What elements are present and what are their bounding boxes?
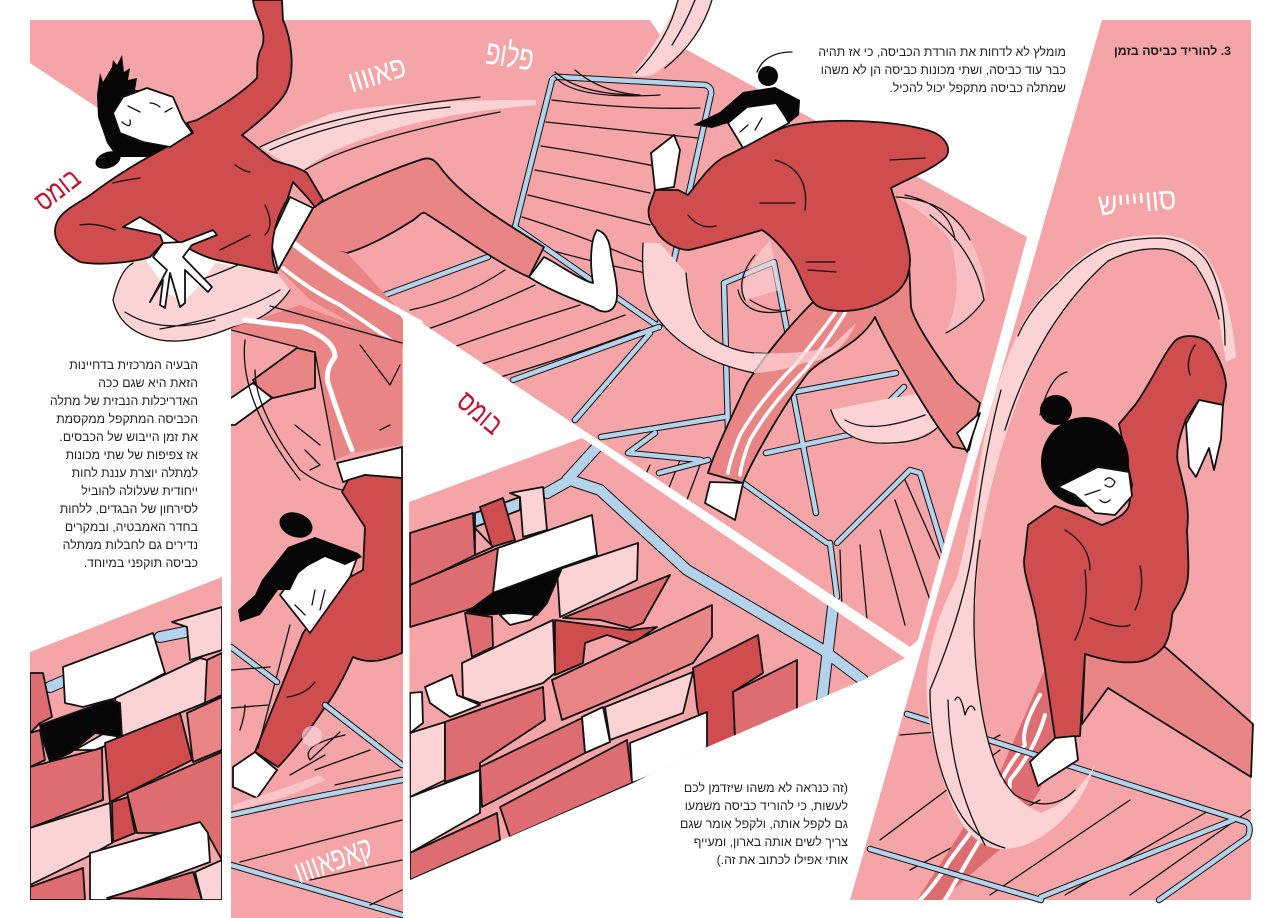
figure three: lower hand (1030, 736, 1078, 786)
figure two: woman with rack (649, 52, 980, 520)
figure three: big ribbon arc (927, 235, 1236, 849)
hand (150, 230, 217, 308)
figure two: ribbon over leg (754, 323, 856, 373)
strip: fist (233, 752, 277, 798)
motion swirl: top ribbon (555, 0, 712, 96)
figure three: upper hand (1186, 400, 1223, 477)
text block: top: כבר עוד כביסה, ושתי מכונות כביסה הן לא משהו (821, 63, 1066, 77)
red sweater with raised arm (55, 0, 323, 273)
figure three: rack frame (870, 714, 1250, 900)
text block: left: הבעיה המרכזית בדחיינות (69, 358, 198, 372)
panel: centre laundry background (409, 438, 905, 880)
figure three: face (1058, 467, 1132, 515)
sound effect: bomes left: בומס (29, 163, 86, 217)
centre laundry on the rack (410, 447, 863, 880)
motion swirl: ribbon around second figure (643, 195, 985, 445)
text block: bottom: גם לקפל אותה, ולקפל אומר שגם (680, 817, 848, 831)
text block: top: מומלץ לא לדחות את הורדת הכביסה, כי אז תהיה (818, 45, 1066, 59)
sound effect: kapow: קאפאוווו (289, 829, 377, 890)
figure three: woman seen from above (870, 235, 1253, 900)
figure two: fist (651, 135, 680, 190)
sound effect: paaooo: פאוווו (344, 49, 410, 100)
face (113, 88, 192, 147)
text block: left: נדירים גם לחבלות ממתלה (63, 538, 198, 552)
sound effect: plop: פלופ (483, 33, 537, 79)
strip: face (280, 555, 358, 633)
strip: motion lines (244, 340, 342, 490)
text block: top: שמתלה כביסה מתקפל יכול להכיל. (889, 81, 1066, 95)
strip: neck area (320, 495, 365, 560)
figure two: sock right (957, 413, 980, 452)
text block: left: בחדר האמבטיה, ובמקרים (65, 520, 198, 534)
figure three: leg stripes second (945, 715, 1045, 900)
figure two: hair (693, 87, 800, 128)
figure three: left leg dark (917, 669, 1055, 900)
panel: right scene background (850, 20, 1251, 900)
panel: vertical strip background (231, 262, 403, 918)
figure two: pants stripes (728, 313, 835, 473)
text block: left (50, 358, 198, 570)
pants: figure one second leg (280, 240, 403, 350)
lower-left: rack rail (50, 632, 185, 687)
pants stripe lower (283, 268, 400, 347)
lower-left laundry on the rack (30, 607, 222, 900)
figure two: hair bun (758, 66, 778, 86)
strip: waistband (337, 447, 402, 482)
text block: bottom: לעשות, כי להוריד כביסה משמעו (685, 799, 848, 813)
text block: left: את זמן הייבוש של הכבסים. (59, 430, 198, 444)
motion swirl: horizontal ribbon (260, 97, 536, 173)
strip: pants stripe (245, 320, 352, 450)
figure three: seat lines (880, 730, 1250, 895)
text block: bottom: אותי אפילו לכתוב את זה.) (717, 853, 848, 867)
sound effect: bomes centre: בומס (451, 386, 508, 441)
sock and foot (529, 230, 617, 312)
strip: sock (228, 383, 272, 425)
strip: rack rails (231, 647, 402, 915)
pants stripes (293, 243, 420, 323)
heading: step 3: 3. להוריד כביסה בזמן (1114, 44, 1231, 58)
text block: left: אז צפיפות של שתי מכונות (66, 448, 198, 462)
sound effect: swish: סווייייש (1097, 182, 1178, 223)
hair (97, 55, 167, 157)
drying rack in top scene (385, 77, 945, 630)
figure two: sweater (649, 121, 948, 311)
text block: top (818, 45, 1066, 95)
text block: left: לסירחון של הבגדים, ללחות (60, 502, 198, 516)
figure one: falling woman (55, 0, 617, 350)
strip: seat lines (231, 667, 402, 905)
text block: bottom (680, 781, 848, 867)
vertical strip artwork: leg and falling woman (228, 305, 402, 915)
strip: hair (238, 537, 362, 622)
text block: bottom: צריך לשים אותה בארון, ומעייף (694, 835, 848, 849)
figure two: sock bottom (705, 482, 743, 520)
hair bun (93, 148, 123, 172)
text block: left: כביסה תוקפני במיוחד. (84, 556, 198, 570)
figure two: pants and legs (708, 263, 980, 483)
strip: pants (231, 305, 402, 460)
figure three: hair bun (1040, 395, 1072, 425)
figure two: pants stripes second (740, 313, 845, 475)
strip: sweater and arm (255, 475, 402, 767)
figure three: leg stripes (920, 695, 1040, 900)
text block: left: למתלה יוצרת עננת לחות (72, 466, 198, 480)
text block: left: האדריכלות הנבזית של מתלה (50, 394, 198, 408)
figure three: right leg (1082, 647, 1253, 777)
strip: hair bun (280, 512, 312, 538)
text block: left: ייחודית שעלולה להוביל (81, 484, 198, 498)
text block: left: הזאת היא שגם ככה (98, 376, 198, 390)
strip: motion highlight (233, 775, 325, 810)
strip: knee (253, 348, 315, 398)
figure two: face (728, 103, 789, 148)
pants: figure one thigh (278, 158, 544, 277)
motion swirl: oval under first figure (113, 217, 290, 341)
centre: rack rail (547, 447, 863, 700)
panel: top scene background (30, 20, 1027, 647)
text block: left: הכביסה המתקפל ממקסמת (56, 412, 198, 426)
text block: bottom: (זה כנראה לא משהו שיזדמן לכם (684, 781, 848, 795)
panel: lower-left laundry background (30, 577, 222, 900)
white shirt hem (270, 197, 313, 270)
figure three: sweater (1024, 336, 1226, 738)
figure three: hair (1041, 417, 1129, 507)
